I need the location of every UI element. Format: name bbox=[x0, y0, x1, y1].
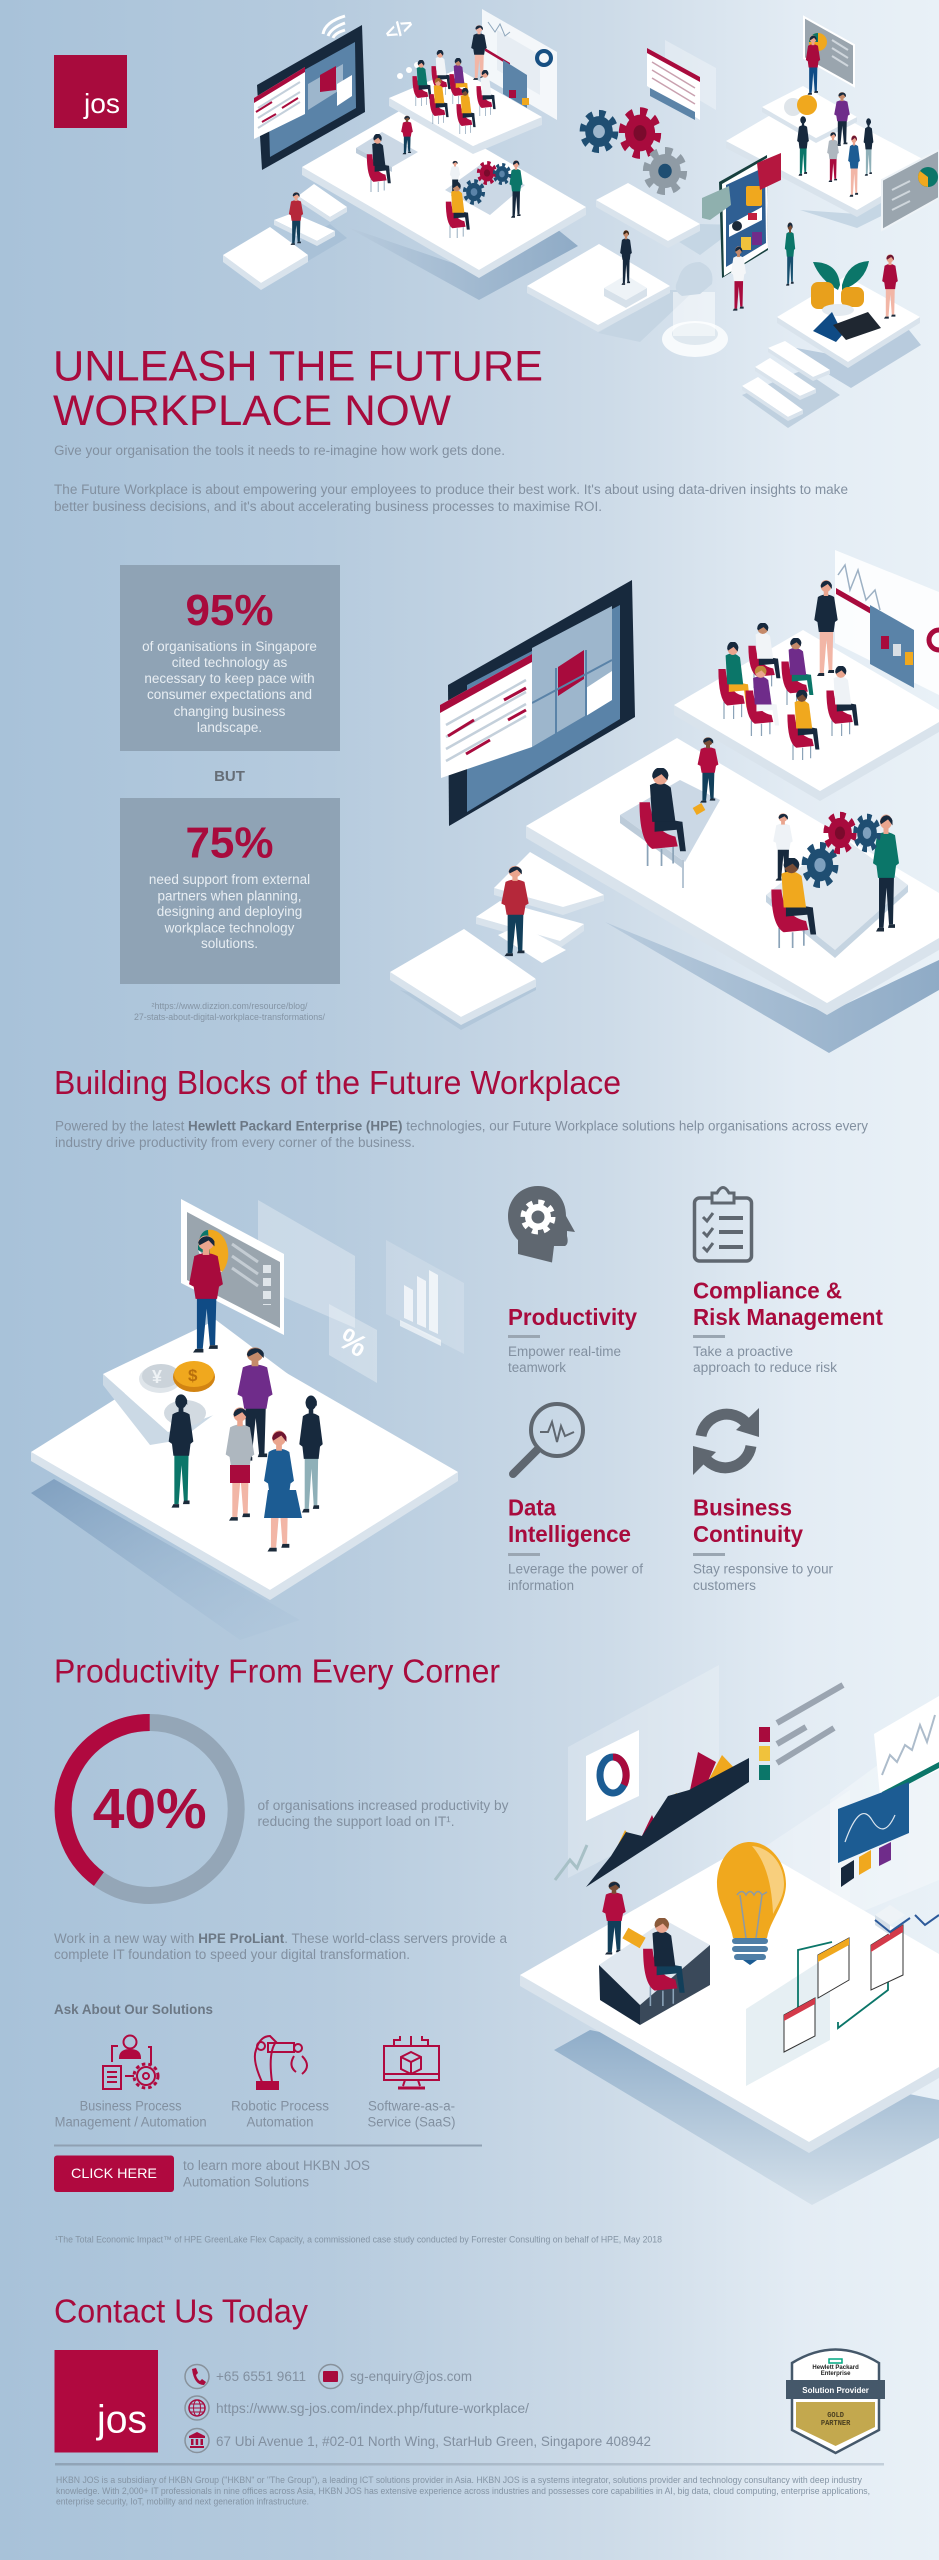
compliance block: Risk Management bbox=[693, 1304, 883, 1330]
logo large bbox=[54, 2350, 158, 2452]
chart: 40% ring bbox=[63, 1722, 236, 1896]
icon: business process management bbox=[103, 2036, 158, 2089]
walking man bbox=[501, 866, 529, 956]
company description: HKBN JOS is a subsidiary of HKBN Group ("HKBN" or "The Group"), a leading ICT solutions provider in Asia. HKBN JOS is a systems integrator, solutions provider and technology consultancy with deep industry bbox=[56, 2475, 862, 2485]
large platform bbox=[526, 738, 939, 1015]
translucent panels bbox=[568, 1665, 939, 1950]
presenter chart panel bbox=[482, 9, 557, 120]
gold partner badge: PARTNER bbox=[821, 2420, 851, 2428]
hero illustration bbox=[223, 9, 939, 428]
step shadows bbox=[400, 978, 536, 1030]
intro text bbox=[54, 443, 848, 514]
platform shadows bbox=[249, 165, 934, 428]
panel: 75% statistic: 75% bbox=[185, 818, 274, 868]
main platform bbox=[302, 105, 586, 278]
donut card bbox=[586, 1730, 639, 1821]
but label: BUT bbox=[214, 768, 245, 785]
upper classroom platform bbox=[389, 69, 542, 154]
group of people bbox=[169, 1347, 323, 1551]
woman at board bbox=[189, 1235, 223, 1353]
large platform bbox=[520, 1844, 939, 2153]
standing people bbox=[620, 222, 898, 319]
compliance block: Take a proactive bbox=[693, 1344, 793, 1359]
icon: head with gear bbox=[508, 1186, 575, 1262]
solutions heading: Ask About Our Solutions bbox=[54, 2002, 213, 2017]
building blocks intro: Powered by the latest Hewlett Packard Enterprise (HPE) technologies, our Future Workplace solutions help organisations across every bbox=[55, 1118, 868, 1134]
panel: 95% statistic: necessary to keep pace with bbox=[144, 671, 315, 686]
logo bbox=[54, 55, 127, 128]
panel: 75% statistic: solutions. bbox=[201, 936, 258, 951]
call to action text bbox=[183, 2158, 370, 2190]
source note: ²https://www.dizzion.com/resource/blog/ bbox=[152, 1001, 308, 1011]
icon: magnifier with pulse bbox=[513, 1404, 583, 1474]
right board bbox=[882, 150, 939, 230]
business continuity block: Stay responsive to your bbox=[693, 1562, 833, 1576]
panel: 95% statistic: cited technology as bbox=[172, 655, 288, 670]
ring caption: of organisations increased productivity by bbox=[258, 1798, 509, 1813]
flow of tables bbox=[784, 1925, 903, 2052]
logo: jos bbox=[83, 88, 120, 119]
panel: 95% statistic: landscape. bbox=[197, 720, 262, 735]
panel: 95% statistic: consumer expectations and bbox=[147, 687, 312, 702]
solution labels bbox=[55, 2098, 456, 2130]
solution labels: Automation bbox=[246, 2114, 314, 2130]
desk meeting bbox=[356, 116, 418, 192]
building blocks intro bbox=[55, 1118, 868, 1150]
icon: wifi and code symbols: </> bbox=[382, 14, 417, 46]
stacked blocks bbox=[875, 1905, 939, 1935]
stairs bbox=[223, 184, 347, 290]
divider bbox=[54, 2144, 482, 2146]
phone with social icons bbox=[702, 153, 781, 278]
website: https://www.sg-jos.com/index.php/future-workplace/ bbox=[216, 2400, 529, 2416]
coins: $ bbox=[188, 1366, 198, 1385]
heading: building blocks: Building Blocks of the Future Workplace bbox=[54, 1064, 621, 1101]
data intelligence block: Data bbox=[508, 1494, 556, 1520]
business continuity block: Continuity bbox=[693, 1521, 803, 1547]
title bbox=[53, 342, 543, 435]
source note: 27-stats-about-digital-workplace-transformations/ bbox=[134, 1012, 325, 1022]
business continuity block: Business bbox=[693, 1494, 792, 1520]
icon: refresh arrows bbox=[693, 1408, 759, 1475]
building blocks intro: industry drive productivity from every corner of the business. bbox=[55, 1135, 415, 1150]
ring caption: reducing the support load on IT¹. bbox=[258, 1814, 454, 1829]
right side platforms bbox=[527, 86, 934, 421]
productivity block: Productivity bbox=[508, 1304, 637, 1330]
ring caption bbox=[258, 1798, 509, 1829]
icon: wifi and code symbols bbox=[323, 14, 420, 79]
icon: mail bbox=[319, 2364, 343, 2388]
button: click here: CLICK HERE bbox=[71, 2165, 157, 2181]
panel: 75% statistic: need support from external bbox=[149, 872, 310, 887]
icon: software as a service bbox=[384, 2036, 439, 2088]
plant, coins and cards bbox=[811, 261, 881, 342]
business continuity block: customers bbox=[693, 1578, 756, 1593]
footnote: ¹The Total Economic Impact™ of HPE GreenLake Flex Capacity, a commissioned case study conducted by Forrester Consulting on behalf of HPE, May 2018 bbox=[55, 2234, 662, 2244]
business continuity block bbox=[693, 1494, 833, 1593]
panel: 75% statistic: partners when planning, bbox=[157, 888, 302, 904]
data intelligence block bbox=[508, 1494, 643, 1593]
gear table team bbox=[445, 160, 525, 238]
tablet with dashboard bbox=[440, 580, 635, 826]
classroom people bbox=[718, 580, 858, 760]
coins bbox=[139, 1361, 215, 1426]
translucent chart panels bbox=[258, 1200, 464, 1383]
icon: phone bbox=[185, 2364, 209, 2388]
icon: robotic arm bbox=[255, 2036, 307, 2089]
productivity illustration bbox=[520, 1665, 939, 2205]
legend swatches bbox=[759, 1685, 843, 1780]
divider bbox=[55, 2463, 884, 2466]
compliance block: approach to reduce risk bbox=[693, 1360, 837, 1375]
button: click here bbox=[54, 2156, 174, 2192]
proliant text bbox=[54, 1931, 507, 1962]
gold partner badge: Enterprise bbox=[821, 2371, 851, 2377]
panel: 95% statistic: changing business bbox=[174, 704, 286, 719]
call to action text: to learn more about HKBN JOS bbox=[183, 2158, 370, 2173]
translucent chart panels: % bbox=[333, 1322, 373, 1364]
call to action text: Automation Solutions bbox=[183, 2174, 309, 2190]
upper platform bbox=[103, 1320, 300, 1445]
data intelligence block: Intelligence bbox=[508, 1521, 631, 1547]
pale floor panel bbox=[746, 1955, 830, 2086]
big gears bbox=[583, 111, 684, 191]
company description: knowledge. With 2,000+ IT professionals in nine offices across Asia, HKBN JOS has extensive experience across industries and possesses core capabilities in AI, big data, cloud computing, enterprise applications, bbox=[56, 2486, 870, 2496]
panel: 95% statistic: 95% bbox=[185, 586, 274, 635]
solution labels: Management / Automation bbox=[55, 2114, 207, 2130]
intro text: The Future Workplace is about empowering your employees to produce their best work. It's about using data-driven insights to make bbox=[54, 482, 848, 497]
panel: 75% statistic: designing and deploying bbox=[157, 904, 302, 919]
intro text: Give your organisation the tools it needs to re-imagine how work gets done. bbox=[54, 443, 505, 458]
phone number: +65 6551 9611 bbox=[216, 2368, 306, 2384]
gold partner badge: Hewlett Packard bbox=[812, 2365, 859, 2371]
solution labels: Robotic Process bbox=[231, 2098, 329, 2114]
coins: ¥ bbox=[152, 1367, 162, 1387]
gold partner badge: Solution Provider bbox=[802, 2386, 869, 2395]
large platform shadow bbox=[605, 922, 939, 1053]
compliance block: Compliance & bbox=[693, 1278, 842, 1304]
tablet with dashboard bbox=[254, 25, 365, 170]
icon: building bbox=[185, 2428, 209, 2452]
company description: enterprise security, IoT, mobility and next generation infrastructure. bbox=[56, 2496, 309, 2506]
data intelligence block: information bbox=[508, 1578, 574, 1593]
presenter and classroom audience bbox=[412, 25, 496, 134]
icon: light bulb bbox=[717, 1842, 786, 1965]
platform shadow bbox=[554, 2030, 939, 2205]
upper platform bbox=[674, 630, 939, 801]
productivity block bbox=[508, 1304, 637, 1375]
solution labels: Service (SaaS) bbox=[368, 2114, 456, 2130]
panel: 95% statistic bbox=[120, 565, 340, 751]
large platform bbox=[31, 1334, 458, 1600]
company description bbox=[56, 2475, 870, 2506]
compliance block bbox=[693, 1278, 883, 1375]
gear table team bbox=[766, 813, 908, 958]
faded line symbol bbox=[555, 1845, 587, 1880]
title: WORKPLACE NOW bbox=[53, 387, 451, 435]
title: UNLEASH THE FUTURE bbox=[53, 342, 543, 390]
gold partner badge: GOLD bbox=[827, 2412, 844, 2420]
gold partner badge bbox=[786, 2350, 885, 2453]
team illustration bbox=[31, 1199, 464, 1640]
contact details bbox=[185, 2364, 651, 2452]
productivity block: teamwork bbox=[508, 1360, 566, 1375]
solution labels: Software-as-a- bbox=[368, 2098, 455, 2114]
icon: clipboard checklist bbox=[694, 1188, 752, 1261]
chart board bbox=[181, 1199, 284, 1335]
address: 67 Ubi Avenue 1, #02-01 North Wing, StarHub Green, Singapore 408942 bbox=[216, 2433, 651, 2449]
panel: 95% statistic: of organisations in Singapore bbox=[142, 639, 317, 654]
workplace illustration bbox=[390, 550, 939, 1053]
icon: globe bbox=[185, 2396, 209, 2420]
woman at board and group bbox=[784, 17, 873, 197]
proliant text: complete IT foundation to speed your digital transformation. bbox=[54, 1947, 410, 1962]
desk meeting bbox=[620, 737, 720, 888]
panel: 75% statistic: workplace technology bbox=[164, 920, 295, 936]
logo large: jos bbox=[96, 2398, 147, 2442]
productivity block: Empower real-time bbox=[508, 1344, 621, 1359]
line chart card bbox=[874, 1696, 939, 1798]
stairs bbox=[390, 852, 604, 1025]
platform shadow bbox=[31, 1479, 300, 1640]
chart: 40% ring: 40% bbox=[93, 1777, 207, 1841]
heading: contact: Contact Us Today bbox=[54, 2292, 308, 2330]
cloud on glass pedestal bbox=[662, 262, 728, 357]
walking man bbox=[289, 192, 303, 245]
heading: productivity: Productivity From Every Corner bbox=[54, 1652, 500, 1690]
panel: 75% statistic bbox=[120, 798, 340, 984]
proliant text: Work in a new way with HPE ProLiant. These world-class servers provide a bbox=[54, 1931, 507, 1946]
mountain chart bbox=[586, 1752, 749, 1887]
document panel bbox=[647, 40, 716, 120]
source note bbox=[134, 1001, 325, 1022]
desk with people bbox=[599, 1882, 710, 2025]
solution labels: Business Process bbox=[80, 2098, 182, 2114]
data intelligence block: Leverage the power of bbox=[508, 1562, 643, 1576]
presentation charts bbox=[835, 550, 939, 695]
intro text: better business decisions, and it's about accelerating business processes to maximise ROI. bbox=[54, 499, 602, 514]
email: sg-enquiry@jos.com bbox=[350, 2368, 472, 2384]
blue curve card bbox=[838, 1782, 909, 1887]
